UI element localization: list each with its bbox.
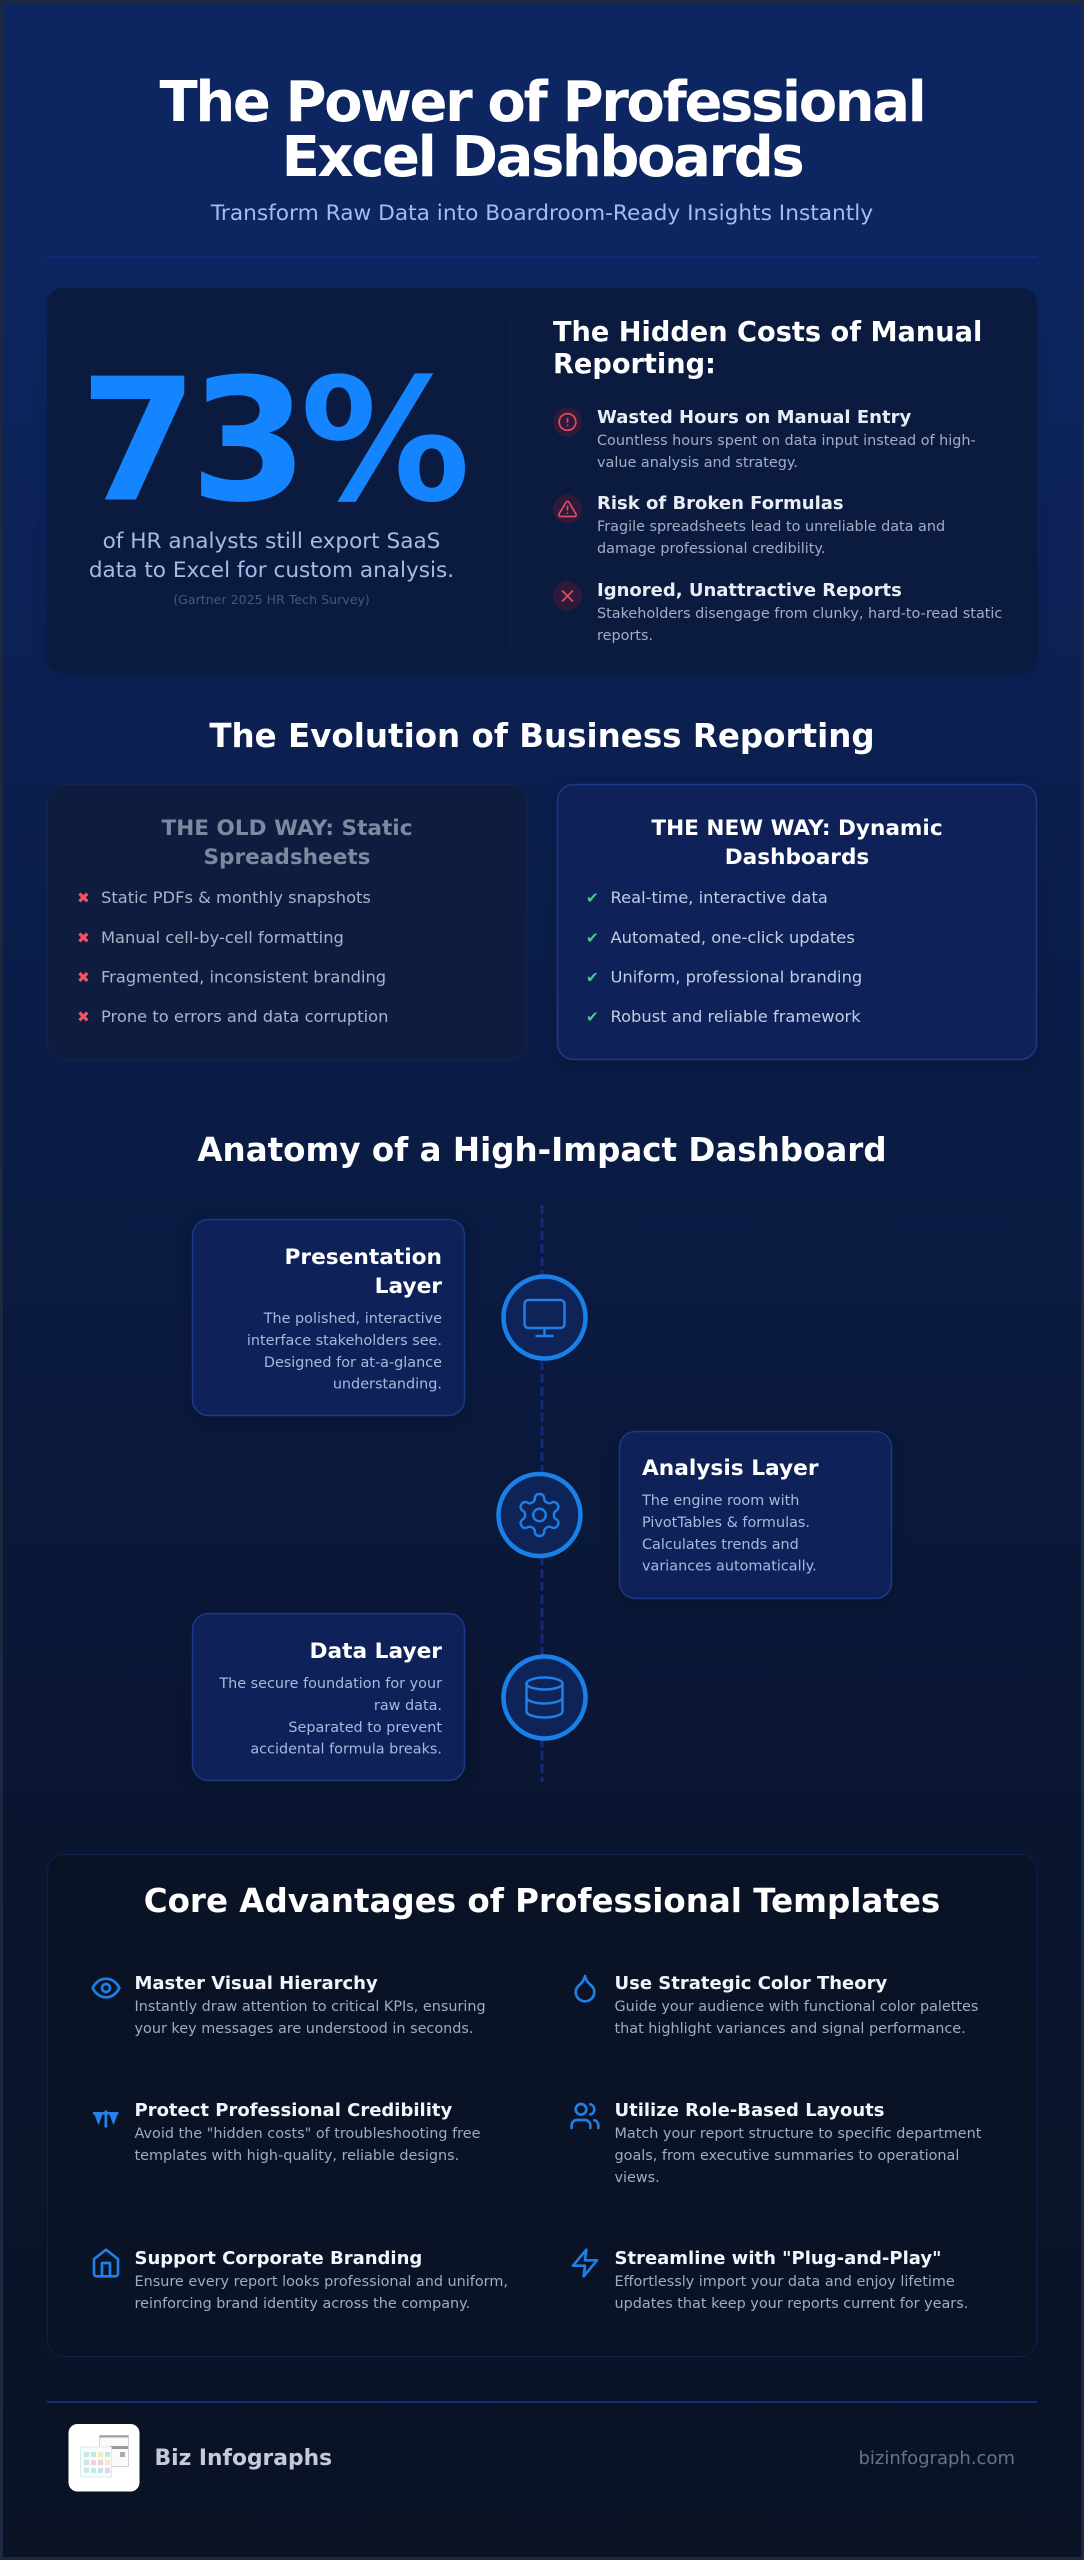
card: analysis layer bbox=[620, 1432, 892, 1598]
icon: scales bbox=[94, 2111, 118, 2127]
icon: alert circle bbox=[559, 414, 576, 430]
cost item: ignored reports: Stakeholders disengage from clunky, hard-to-read static bbox=[597, 606, 1002, 622]
advantage: plug and play: Effortlessly import your data and enjoy lifetime bbox=[614, 2274, 955, 2290]
card: data layer: Separated to prevent bbox=[288, 1720, 442, 1736]
cost item: broken formulas bbox=[553, 493, 945, 557]
icon: users bbox=[572, 2104, 598, 2128]
source note: (Gartner 2025 HR Tech Survey) bbox=[173, 592, 370, 607]
panel: the old way bbox=[48, 784, 526, 1060]
header bbox=[160, 70, 924, 226]
card: presentation layer: Presentation bbox=[284, 1245, 442, 1270]
card: presentation layer: Designed for at-a-glance bbox=[264, 1355, 442, 1371]
heading: evolution: The Evolution of Business Reporting bbox=[209, 717, 875, 755]
icon: lightning bbox=[573, 2250, 597, 2276]
new way list: ✔ bbox=[586, 889, 599, 907]
advantage: corporate branding: Support Corporate Branding bbox=[134, 2248, 422, 2269]
card: data layer: accidental formula breaks. bbox=[250, 1742, 442, 1758]
card: analysis layer: PivotTables & formulas. bbox=[642, 1515, 810, 1531]
card: presentation layer: interface stakeholders see. bbox=[247, 1333, 442, 1349]
panel: core advantages bbox=[48, 1854, 1036, 2356]
new way list: ✔ bbox=[586, 968, 599, 986]
new way list bbox=[586, 888, 862, 1026]
advantage: credibility bbox=[94, 2100, 481, 2164]
advantage: role based layouts: goals, from executive summaries to operational bbox=[614, 2148, 959, 2164]
website: bizinfograph.com bbox=[858, 2448, 1015, 2469]
card: analysis layer: variances automatically. bbox=[642, 1558, 817, 1574]
brand name: Biz Infographs bbox=[154, 2446, 332, 2471]
new way list: ✔ bbox=[586, 1008, 599, 1026]
card: analysis layer: The engine room with bbox=[641, 1493, 799, 1509]
diagram: dashboard layers bbox=[192, 1205, 892, 1782]
cost item: broken formulas: Risk of Broken Formulas bbox=[597, 493, 844, 514]
new way list: Robust and reliable framework bbox=[610, 1007, 861, 1026]
old way list: Manual cell-by-cell formatting bbox=[101, 928, 344, 947]
icon: database bbox=[504, 1656, 586, 1738]
statistic description: of HR analysts still export SaaS bbox=[103, 529, 440, 554]
advantage: color theory: that highlight variances and signal performance. bbox=[614, 2021, 966, 2037]
new way list: Uniform, professional branding bbox=[610, 968, 862, 986]
cost item: ignored reports: Ignored, Unattractive Reports bbox=[597, 580, 902, 601]
cost item: ignored reports bbox=[553, 580, 1002, 644]
title: Excel Dashboards bbox=[282, 125, 802, 190]
old way heading bbox=[161, 816, 413, 870]
old way list: ✖ bbox=[77, 968, 90, 986]
old way list bbox=[77, 888, 388, 1026]
new way list: ✔ bbox=[586, 929, 599, 947]
heading: hidden costs bbox=[553, 317, 982, 380]
old way heading: THE OLD WAY: Static bbox=[161, 816, 413, 841]
advantage: credibility: Avoid the "hidden costs" of troubleshooting free bbox=[134, 2126, 481, 2142]
new way heading bbox=[651, 816, 943, 870]
card: data layer bbox=[192, 1614, 464, 1780]
icon: monitor bbox=[504, 1276, 586, 1358]
old way list: Fragmented, inconsistent branding bbox=[101, 968, 386, 986]
advantage: visual hierarchy: your key messages are understood in seconds. bbox=[134, 2021, 473, 2037]
advantage: plug and play bbox=[573, 2248, 968, 2312]
card: presentation layer: understanding. bbox=[333, 1376, 442, 1392]
advantage: corporate branding: reinforcing brand identity across the company. bbox=[134, 2296, 470, 2312]
advantage: plug and play: Streamline with "Plug-and-Play" bbox=[614, 2248, 941, 2269]
cost item: wasted hours: Countless hours spent on data input instead of high- bbox=[597, 433, 976, 449]
cost item: wasted hours bbox=[553, 407, 976, 471]
heading: core advantages: Core Advantages of Professional Templates bbox=[144, 1882, 940, 1920]
icon: home bbox=[94, 2250, 118, 2276]
card: data layer: The secure foundation for your bbox=[218, 1676, 442, 1692]
title: The Power of Professional bbox=[160, 70, 924, 135]
old way list: ✖ bbox=[77, 889, 90, 907]
cost item: wasted hours: Wasted Hours on Manual Entry bbox=[597, 407, 911, 428]
card: presentation layer bbox=[192, 1220, 464, 1416]
advantage: plug and play: updates that keep your reports current for years. bbox=[614, 2296, 968, 2312]
icon: gear bbox=[498, 1474, 580, 1556]
old way list: ✖ bbox=[77, 929, 90, 947]
advantage: visual hierarchy: Instantly draw attention to critical KPIs, ensuring bbox=[134, 1999, 486, 2015]
icon: warning triangle bbox=[559, 501, 576, 516]
old way heading: Spreadsheets bbox=[203, 845, 371, 870]
advantage: role based layouts: Match your report structure to specific department bbox=[614, 2126, 982, 2142]
old way list: Static PDFs & monthly snapshots bbox=[101, 888, 371, 907]
icon: droplet bbox=[576, 1976, 594, 2001]
advantage: credibility: templates with high-quality, reliable designs. bbox=[134, 2148, 459, 2164]
heading: hidden costs: The Hidden Costs of Manual bbox=[553, 317, 982, 348]
card: analysis layer: Calculates trends and bbox=[642, 1537, 799, 1553]
cost item: broken formulas: damage professional credibility. bbox=[597, 541, 825, 557]
title bbox=[160, 70, 924, 190]
cost item: broken formulas: Fragile spreadsheets lead to unreliable data and bbox=[597, 519, 945, 535]
advantage: color theory: Use Strategic Color Theory bbox=[614, 1973, 888, 1994]
panel: the new way bbox=[558, 784, 1036, 1060]
subtitle: Transform Raw Data into Boardroom-Ready Insights Instantly bbox=[210, 201, 873, 226]
heading: hidden costs: Reporting: bbox=[553, 349, 716, 380]
heading: anatomy: Anatomy of a High-Impact Dashboard bbox=[197, 1131, 887, 1169]
card: data layer: Data Layer bbox=[309, 1639, 442, 1664]
statistic description: data to Excel for custom analysis. bbox=[89, 558, 454, 583]
advantage: visual hierarchy: Master Visual Hierarchy bbox=[134, 1973, 378, 1994]
card: presentation layer: The polished, interactive bbox=[263, 1311, 442, 1327]
new way list: Real-time, interactive data bbox=[610, 888, 828, 907]
old way list: Prone to errors and data corruption bbox=[101, 1007, 388, 1026]
advantage: color theory bbox=[576, 1973, 978, 2037]
new way list: Automated, one-click updates bbox=[610, 928, 855, 947]
advantage: corporate branding bbox=[94, 2248, 508, 2312]
new way heading: THE NEW WAY: Dynamic bbox=[651, 816, 943, 841]
panel: hero statistic and hidden costs bbox=[47, 288, 1037, 673]
new way heading: Dashboards bbox=[725, 845, 869, 870]
card: analysis layer: Analysis Layer bbox=[642, 1456, 819, 1481]
big statistic: 73% bbox=[80, 342, 465, 540]
logo bbox=[68, 2424, 140, 2492]
card: data layer: raw data. bbox=[374, 1698, 442, 1714]
old way list: ✖ bbox=[77, 1008, 90, 1026]
icon: eye bbox=[93, 1979, 119, 1997]
advantage: role based layouts bbox=[572, 2100, 982, 2186]
cost item: ignored reports: reports. bbox=[597, 628, 653, 644]
advantage: role based layouts: views. bbox=[614, 2170, 660, 2186]
icon: x mark bbox=[562, 591, 572, 601]
statistic description bbox=[89, 529, 454, 583]
cost item: wasted hours: value analysis and strategy. bbox=[597, 455, 798, 471]
footer bbox=[68, 2424, 1015, 2492]
advantage: color theory: Guide your audience with functional color palettes bbox=[614, 1999, 978, 2015]
advantage: credibility: Protect Professional Credibility bbox=[134, 2100, 452, 2121]
card: presentation layer: Layer bbox=[375, 1274, 442, 1299]
advantage: role based layouts: Utilize Role-Based Layouts bbox=[614, 2100, 884, 2121]
advantage: corporate branding: Ensure every report looks professional and uniform, bbox=[134, 2274, 508, 2290]
advantage: visual hierarchy bbox=[93, 1973, 486, 2037]
